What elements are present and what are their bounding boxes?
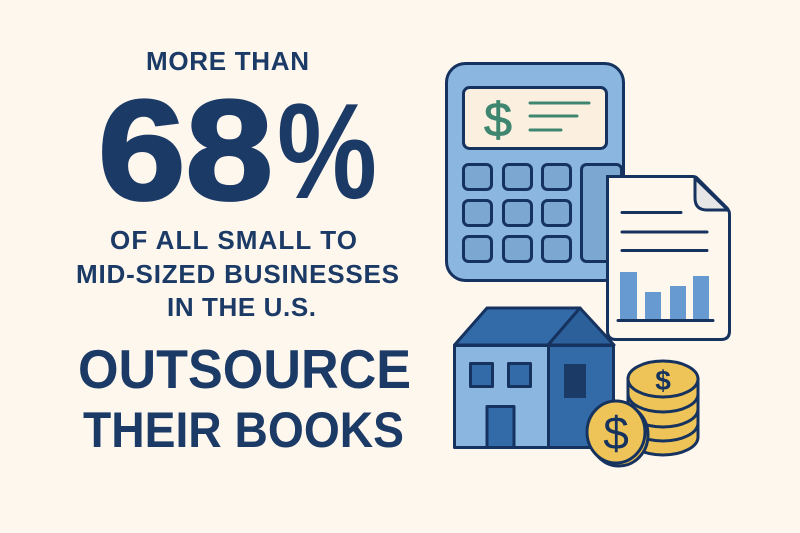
- heading: outsource their books: OUTSOURCE: [78, 338, 411, 400]
- house front wall: [454, 346, 548, 448]
- big statistic: 68%: 68: [98, 71, 273, 230]
- text block: of all small to mid-sized businesses in the U.S.: OF ALL SMALL TO: [110, 225, 357, 255]
- text block: of all small to mid-sized businesses in the U.S.: IN THE U.S.: [167, 292, 316, 322]
- text block: of all small to mid-sized businesses in the U.S.: [76, 225, 399, 322]
- icon: coin stack: [628, 361, 698, 455]
- heading: outsource their books: [78, 338, 411, 458]
- icon: house: [454, 308, 614, 448]
- text: more than: MORE THAN: [146, 46, 309, 76]
- calculator screen readout: $: [484, 94, 512, 147]
- big statistic: 68%: %: [277, 75, 377, 227]
- big statistic: 68%: [98, 71, 377, 230]
- icon: document with bar chart: [608, 176, 730, 340]
- calculator screen readout: [484, 94, 589, 147]
- icon: front coin: $: [603, 407, 629, 459]
- text block: of all small to mid-sized businesses in the U.S.: MID-SIZED BUSINESSES: [76, 259, 399, 289]
- house door: [487, 406, 514, 448]
- heading: outsource their books: THEIR BOOKS: [83, 402, 404, 458]
- icon: front coin: [587, 401, 648, 466]
- house side wall: [548, 346, 614, 448]
- calculator screen: [464, 88, 606, 148]
- house roof: [454, 308, 580, 345]
- icon: coin stack: $: [655, 365, 671, 396]
- document fold: [695, 178, 728, 210]
- document bar chart: [618, 272, 713, 320]
- house windows: [470, 364, 492, 386]
- calculator keys: [464, 164, 622, 262]
- icon: calculator: [446, 64, 624, 280]
- document text lines: [622, 212, 707, 250]
